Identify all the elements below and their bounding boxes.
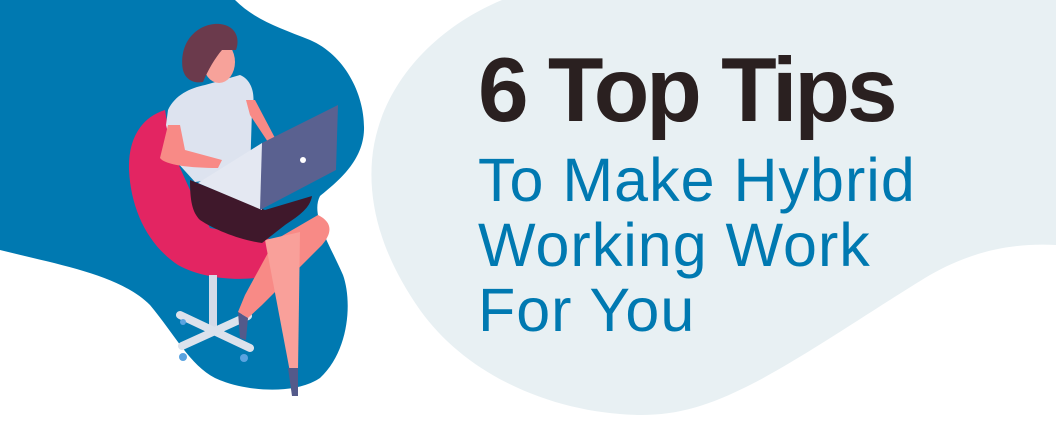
skirt xyxy=(190,180,312,243)
subtitle: To Make Hybrid xyxy=(478,146,916,214)
title: 6 Top Tips xyxy=(478,40,895,141)
head xyxy=(203,41,235,83)
blue blob xyxy=(0,0,364,390)
arms xyxy=(160,125,222,168)
legs xyxy=(238,215,329,318)
subtitle: Working Work xyxy=(478,211,871,279)
laptop xyxy=(198,143,262,210)
chair xyxy=(129,110,275,279)
person on chair xyxy=(129,24,338,396)
subtitle xyxy=(478,146,916,344)
subtitle: For You xyxy=(478,276,695,344)
shirt xyxy=(166,75,254,182)
grey blob xyxy=(371,0,1056,415)
